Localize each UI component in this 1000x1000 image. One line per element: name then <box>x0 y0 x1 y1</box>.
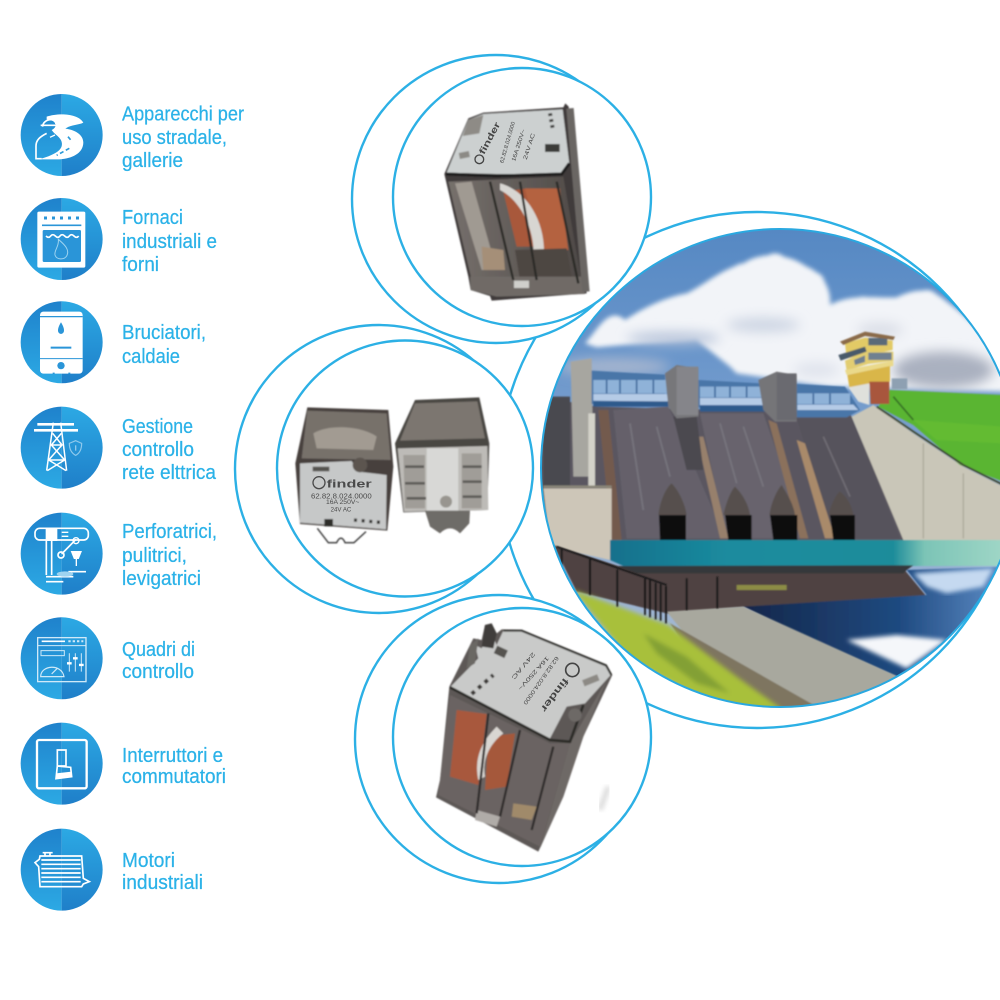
label: switches <box>122 745 226 788</box>
label: drills: levigatrici <box>122 568 201 590</box>
label: control panels: controllo <box>122 661 194 683</box>
relay photo: bottom <box>436 623 612 852</box>
label: grid control: rete elttrica <box>122 462 217 484</box>
label: road tunnels: uso stradale, <box>122 127 227 149</box>
label: grid control: controllo <box>122 439 194 461</box>
ring: middle inner <box>277 340 533 596</box>
left lower wall <box>543 488 612 560</box>
ring: middle outer <box>235 325 523 613</box>
relay label: 16A 250V~ <box>515 655 550 692</box>
walkway <box>667 607 897 710</box>
left grass <box>573 590 783 710</box>
label: control panels: Quadri di <box>122 639 195 661</box>
relay label: 16A 250V~ <box>511 128 527 162</box>
right wall <box>852 405 1000 540</box>
relay label <box>311 478 373 514</box>
relay label: 62.82.8.024.0000 <box>499 121 517 164</box>
river <box>743 567 1000 677</box>
icon: oven <box>21 198 103 280</box>
icon: boiler <box>21 301 103 383</box>
item: drills <box>21 513 217 595</box>
icon: switch <box>21 723 103 805</box>
clouds <box>557 253 1000 392</box>
ring: hydro plant outer <box>499 212 1000 728</box>
relay label: 16A 250V~ <box>326 499 360 506</box>
label: switches: commutatori <box>122 766 226 788</box>
fence <box>557 547 717 623</box>
label: road tunnels <box>122 104 244 172</box>
relay label: 24V AC <box>510 651 536 680</box>
relay label <box>477 120 537 164</box>
relay photo: top <box>444 103 587 301</box>
gates <box>658 483 687 515</box>
label: motors: Motori <box>122 850 175 872</box>
footbridge deck <box>617 565 913 573</box>
item: switches <box>21 723 226 805</box>
dam bridge <box>592 371 665 404</box>
panel: relay bottom <box>355 595 651 883</box>
relay photo: middle pair <box>295 397 489 543</box>
item: motors <box>21 829 203 911</box>
item: furnaces <box>21 198 217 280</box>
relay label: 62.82.8.024.0000 <box>311 493 372 500</box>
relay label: 62.82.8.024.0000 <box>521 655 559 705</box>
gravel <box>670 623 812 706</box>
item: control panels <box>21 617 195 699</box>
label: drills: pulitrici, <box>122 545 187 567</box>
ring: bottom inner <box>393 608 651 866</box>
relay label: finder <box>538 676 570 714</box>
panel: application list <box>21 94 244 911</box>
relay label <box>510 651 570 714</box>
label: grid control: Gestione <box>122 416 193 438</box>
panel: relay top <box>352 55 651 343</box>
label: burners: Bruciatori, <box>122 322 206 344</box>
control tower <box>845 338 893 358</box>
label: burners <box>122 322 206 368</box>
label: drills: Perforatrici, <box>122 521 217 543</box>
label: control panels <box>122 639 195 683</box>
label: drills <box>122 521 217 590</box>
relay label: finder <box>327 478 373 490</box>
label: road tunnels: gallerie <box>122 150 183 172</box>
grass bank <box>878 390 1000 482</box>
dam left pier <box>571 358 593 477</box>
relay label: 24V AC <box>523 133 537 161</box>
item: road tunnels <box>21 94 244 176</box>
label: road tunnels: Apparecchi per <box>122 104 244 126</box>
item: grid control <box>21 407 217 489</box>
panel: relay middle <box>235 325 533 613</box>
label: furnaces: forni <box>122 254 159 276</box>
ring: top outer <box>352 55 640 343</box>
photo: hydroelectric dam <box>530 210 1000 730</box>
ring: top inner <box>393 68 651 326</box>
relay label: 24V AC <box>331 507 352 514</box>
icon: road <box>21 94 103 176</box>
relay label: finder <box>477 120 503 156</box>
label: furnaces: industriali e <box>122 231 217 253</box>
icon: pylon <box>21 407 103 489</box>
label: grid control <box>122 416 217 484</box>
label: switches: Interruttori e <box>122 745 223 767</box>
label: burners: caldaie <box>122 346 180 368</box>
icon: drill press <box>21 513 103 595</box>
label: furnaces <box>122 207 217 276</box>
label: furnaces: Fornaci <box>122 207 183 229</box>
ground under bridge <box>553 545 927 613</box>
dam piers <box>665 365 698 418</box>
label: motors: industriali <box>122 872 203 894</box>
icon: control panel <box>21 617 103 699</box>
ring: bottom outer <box>355 595 643 883</box>
icon: motor <box>21 829 103 911</box>
label: motors <box>122 850 203 894</box>
dam spillway <box>540 397 905 540</box>
item: burners <box>21 301 206 383</box>
reservoir water <box>610 540 1000 566</box>
